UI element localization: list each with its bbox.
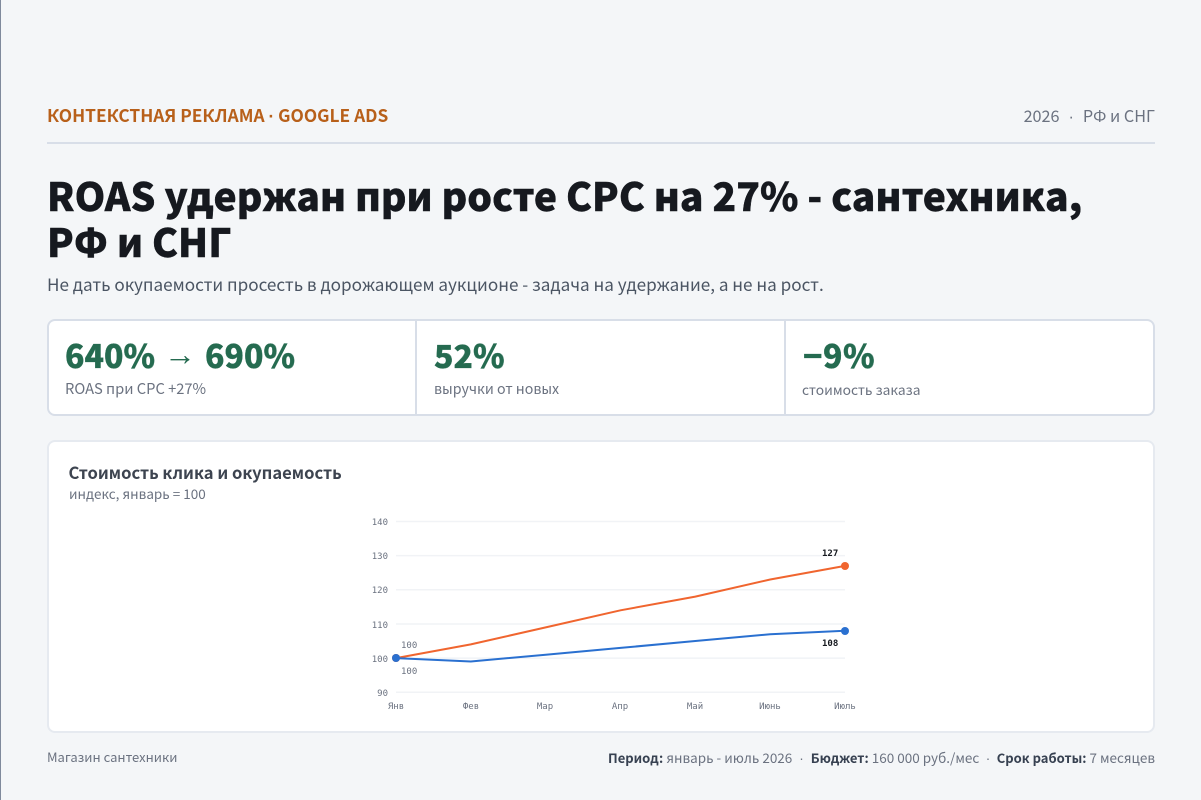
x axis labels: Май xyxy=(687,702,703,712)
x axis labels: Июль xyxy=(834,702,856,712)
y axis labels: 90 xyxy=(377,689,388,699)
title: ROAS удержан при росте CPC на 27% - сантехника, xyxy=(47,167,1082,223)
title: РФ и СНГ xyxy=(47,213,232,269)
KPI: ROAS xyxy=(65,332,295,399)
y axis labels xyxy=(372,518,388,699)
KPI value: 640% → 690% xyxy=(65,332,295,378)
series: ROAS xyxy=(392,627,849,662)
left edge line xyxy=(0,0,1,800)
data labels xyxy=(401,549,838,677)
KPI: order cost xyxy=(802,332,920,399)
KPI: new revenue xyxy=(434,332,559,399)
KPI divider 2 xyxy=(784,321,786,414)
x axis labels: Мар xyxy=(537,702,553,712)
chart subheading: индекс, январь = 100 xyxy=(69,483,206,503)
x axis labels: Фев xyxy=(463,702,479,712)
title xyxy=(47,167,1082,269)
KPI label: стоимость заказа xyxy=(802,379,920,399)
footer left: Магазин сантехники xyxy=(47,747,177,766)
panel: KPI row xyxy=(47,319,1155,416)
x axis labels xyxy=(388,702,856,712)
y axis labels: 100 xyxy=(372,655,388,665)
y axis labels: 130 xyxy=(372,552,388,562)
data labels: 100 xyxy=(401,641,417,651)
KPI label: ROAS при CPC +27% xyxy=(65,378,206,399)
footer right: Период: январь - июль 2026 · Бюджет: 160 000 руб./мес · Срок работы: 7 месяцев xyxy=(608,747,1155,767)
subtitle: Не дать окупаемости просесть в дорожающем аукционе - задача на удержание, а не на рост. xyxy=(47,271,824,296)
x axis labels: Апр xyxy=(612,702,628,712)
series: CPC xyxy=(392,562,849,662)
data labels: 100 xyxy=(401,667,417,677)
y axis labels: 140 xyxy=(372,518,388,528)
header eyebrow: КОНТЕКСТНАЯ РЕКЛАМА · GOOGLE ADS xyxy=(47,102,388,127)
x axis labels: Июнь xyxy=(759,702,781,712)
KPI divider 1 xyxy=(415,321,417,414)
header meta: 2026 · РФ и СНГ xyxy=(1024,103,1155,127)
y axis labels: 110 xyxy=(372,621,388,631)
header divider xyxy=(47,142,1155,144)
KPI label: выручки от новых xyxy=(434,379,559,399)
data labels: 127 xyxy=(822,549,838,559)
data labels: 108 xyxy=(822,639,838,649)
x axis labels: Янв xyxy=(388,702,404,712)
KPI value: −9% xyxy=(803,332,875,378)
chart heading: Стоимость клика и окупаемость xyxy=(68,460,342,484)
panel: chart xyxy=(47,440,1155,733)
KPI value: 52% xyxy=(434,332,505,378)
y axis labels: 120 xyxy=(372,586,388,596)
